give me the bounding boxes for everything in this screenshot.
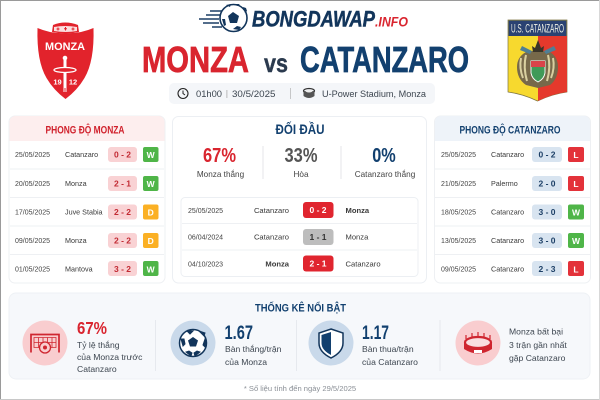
- stat: goals scored: Bàn thắng/trận: [225, 344, 282, 354]
- row: Monza: [65, 236, 87, 245]
- match: Monza: [265, 260, 290, 268]
- title: CATANZARO: [300, 39, 469, 80]
- match info pill: U-Power Stadium, Monza: [322, 89, 426, 99]
- row: 25/05/2025: [441, 152, 476, 159]
- stat: Catanzaro wins: Catanzaro thắng: [355, 169, 416, 179]
- stat: unbeaten: gặp Catanzaro: [509, 353, 566, 363]
- row: L: [573, 264, 579, 274]
- match: Monza: [346, 206, 370, 215]
- match: 1 - 1: [309, 232, 327, 242]
- row: W: [147, 264, 156, 274]
- row: 20/05/2025: [15, 181, 50, 188]
- row: 0 - 2: [538, 150, 556, 160]
- row: 09/05/2025: [441, 266, 476, 274]
- icon: stadium: [304, 88, 314, 98]
- match: [188, 256, 381, 272]
- stat: goals scored: 1.67: [224, 323, 253, 344]
- row: Catanzaro: [65, 150, 98, 159]
- row: 13/05/2025: [441, 238, 476, 245]
- heading: PHONG ĐỘ CATANZARO: [460, 124, 561, 136]
- row: Juve Stabia: [65, 208, 103, 216]
- heading: ĐỐI ĐẦU: [276, 120, 324, 137]
- match: 04/10/2023: [188, 262, 223, 268]
- stat: goals conceded: 1.17: [362, 323, 389, 344]
- stat: win rate: của Monza trước: [77, 352, 143, 362]
- match: 0 - 2: [309, 205, 327, 215]
- row: [441, 176, 584, 191]
- row: D: [148, 236, 154, 246]
- row: 01/05/2025: [15, 266, 50, 274]
- icon: football: [170, 320, 216, 366]
- row: 2 - 2: [114, 236, 131, 246]
- row: 2 - 2: [114, 207, 131, 217]
- row: [441, 233, 584, 248]
- row: 3 - 0: [538, 236, 556, 246]
- row: [441, 261, 584, 276]
- row: 2 - 3: [538, 264, 556, 274]
- stat: draws: Hòa: [293, 170, 309, 179]
- heading: THỐNG KÊ NỔI BẬT: [255, 300, 346, 314]
- row: [15, 261, 158, 276]
- eagle: [517, 40, 558, 88]
- row: Catanzaro: [491, 236, 524, 245]
- row: 17/05/2025: [15, 210, 50, 216]
- row: 3 - 0: [538, 207, 556, 217]
- logo: BongDaWap.info: .INFO: [375, 14, 408, 30]
- row: Catanzaro: [491, 150, 524, 159]
- title: vs: [264, 48, 288, 78]
- row: [441, 147, 584, 162]
- row: L: [573, 179, 579, 189]
- row: D: [148, 207, 154, 217]
- row: [15, 147, 158, 162]
- crest: Monza: 19: [53, 78, 62, 86]
- match: Monza: [346, 232, 369, 242]
- row: Catanzaro: [491, 208, 524, 216]
- match: Catanzaro: [254, 206, 289, 215]
- row: 2 - 1: [114, 178, 131, 188]
- stat: Monza wins: Monza thắng: [197, 169, 245, 179]
- footnote: * Số liệu tính đến ngày 29/5/2025: [244, 384, 356, 393]
- row: 09/05/2025: [15, 238, 50, 245]
- icon: clock: [178, 88, 188, 98]
- stat: goals scored: [170, 320, 282, 367]
- row: Palermo: [491, 179, 518, 188]
- logo: BongDaWap.info: BONGDAWAP: [252, 6, 375, 32]
- panel: head to head: [172, 116, 426, 283]
- icon: speeding football: [199, 4, 247, 32]
- stat: Monza wins: [197, 144, 245, 179]
- stat: Monza wins: 67%: [203, 144, 236, 167]
- icon: goal: [22, 320, 68, 366]
- head to head table: [181, 198, 418, 276]
- row: Catanzaro: [491, 264, 524, 274]
- stat: draws: 33%: [284, 144, 318, 167]
- row: 21/05/2025: [441, 181, 476, 188]
- match: 25/05/2025: [188, 208, 223, 215]
- stat: win rate: Tỷ lệ thắng: [77, 340, 120, 350]
- match: Catanzaro: [346, 260, 381, 268]
- row: 0 - 2: [114, 150, 131, 160]
- logo: BongDaWap.info: [199, 4, 408, 32]
- title: MONZA: [142, 39, 249, 80]
- row: [441, 204, 584, 220]
- row: W: [572, 236, 581, 246]
- match info pill: 30/5/2025: [232, 89, 276, 99]
- panel: key stats: [9, 293, 590, 379]
- row: W: [147, 179, 156, 189]
- row: 18/05/2025: [441, 210, 476, 216]
- stat: Catanzaro wins: 0%: [372, 144, 396, 167]
- row: Monza: [65, 179, 87, 188]
- row: 3 - 2: [114, 264, 131, 274]
- match info pill: [169, 83, 435, 104]
- stat: draws: [284, 144, 318, 179]
- row: 2 - 0: [538, 178, 556, 188]
- stat: unbeaten: 3 trận gần nhất: [509, 340, 567, 350]
- row: 25/05/2025: [15, 152, 50, 159]
- match: 06/04/2024: [188, 234, 223, 242]
- stat: goals scored: của Monza: [225, 357, 267, 367]
- match: [188, 202, 370, 218]
- crest: Monza: MONZA: [45, 41, 85, 53]
- crest: Monza: [37, 22, 94, 99]
- heading: PHONG ĐỘ MONZA: [46, 124, 125, 136]
- panel: Monza form: [9, 116, 165, 283]
- icon: stadium: [456, 320, 500, 366]
- icon: shield: [308, 320, 354, 366]
- stat: win rate: [22, 318, 143, 374]
- match: [188, 229, 369, 245]
- crest: Catanzaro: [508, 20, 567, 101]
- stat: unbeaten: Monza bất bại: [509, 326, 563, 336]
- match: Catanzaro: [254, 232, 289, 242]
- row: W: [572, 207, 581, 217]
- match info pill: 01h00: [196, 89, 222, 99]
- title: [142, 39, 469, 80]
- row: W: [147, 150, 156, 160]
- row: [15, 204, 158, 220]
- stat: unbeaten: [456, 320, 567, 366]
- match: 2 - 1: [309, 258, 327, 268]
- row: L: [573, 150, 579, 160]
- stat: goals conceded: [308, 320, 418, 367]
- stat: goals conceded: của Catanzaro: [362, 357, 418, 367]
- crest: Monza: 12: [69, 78, 77, 86]
- panel: Catanzaro form: [434, 116, 590, 283]
- stat: goals conceded: Bàn thua/trận: [362, 344, 414, 354]
- stat: Catanzaro wins: [355, 144, 416, 179]
- stat: win rate: 67%: [77, 318, 107, 338]
- stat: win rate: Catanzaro: [77, 364, 117, 374]
- row: Mantova: [65, 264, 93, 274]
- row: [15, 176, 158, 191]
- row: [15, 233, 158, 248]
